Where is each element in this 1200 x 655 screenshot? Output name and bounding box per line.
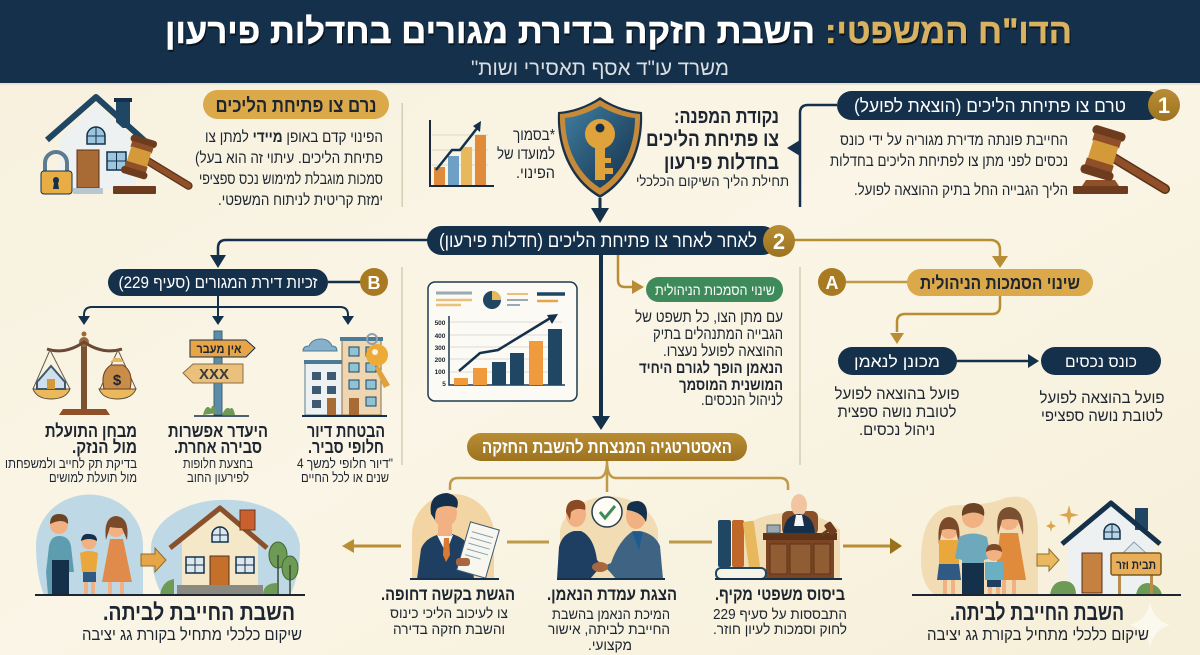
step 1 pill bbox=[837, 91, 1162, 120]
text: alternative housing: הבטחת דיור bbox=[307, 421, 385, 441]
header band bbox=[0, 0, 1200, 85]
outcome: right bbox=[912, 497, 1181, 644]
text bbox=[547, 584, 677, 654]
receiver pill: כונס נכסים bbox=[1065, 354, 1137, 371]
icon: gavel bbox=[1073, 124, 1165, 194]
body text: ימזת קריטית לניתוח המשפטי. bbox=[218, 192, 383, 209]
icon: judge, desk and books bbox=[715, 494, 842, 579]
text: no other reasonable option: בחצעת חלופות bbox=[183, 456, 253, 471]
strategy bracket bbox=[450, 461, 788, 492]
trustee pill: מכונן לנאמן bbox=[854, 353, 940, 371]
text: benefit versus harm bbox=[5, 421, 137, 485]
arrow to trustee bbox=[890, 296, 1000, 344]
text: המיכת הנאמן בהשבת bbox=[552, 607, 670, 623]
text: המושנית המוסמך bbox=[679, 377, 783, 394]
text: הגשת בקשה דחופה. bbox=[381, 584, 515, 604]
panel: deciding factors bbox=[41, 90, 389, 209]
arrow between pills bbox=[957, 354, 1039, 368]
note text bbox=[497, 127, 555, 182]
text: alternative housing: שנים או לכל החיים bbox=[301, 470, 389, 485]
father bbox=[46, 514, 74, 595]
trustee text: פועל בהוצאה לפועל bbox=[834, 385, 960, 403]
green pill: שינוי הסמכות הניהולית bbox=[655, 282, 775, 299]
text: השבת החייבת לביתה. bbox=[950, 599, 1124, 625]
chart: dashboard card: 300 bbox=[435, 345, 446, 352]
subtitle: משרד עו"ד אסף תאסירי ושות" bbox=[471, 57, 729, 80]
trustee pill bbox=[838, 347, 957, 375]
chart: dashboard card bbox=[428, 282, 577, 401]
B pill: זכיות דירת המגורים (סעיף 229) bbox=[118, 273, 318, 292]
panel: A administrative authority bbox=[818, 268, 1164, 439]
text: ההוצאה לפועל נעצרו. bbox=[663, 342, 783, 360]
text: alternative housing: חלופי סביר. bbox=[308, 437, 384, 457]
trees bbox=[269, 542, 298, 595]
receiver text bbox=[1040, 389, 1164, 425]
text: הנאמן הופך לגורם היחיד bbox=[639, 359, 783, 377]
text: הגבייה המתנהלים בתיק bbox=[653, 325, 783, 343]
text bbox=[713, 584, 847, 638]
mother bbox=[995, 507, 1026, 595]
section 2 branch lines bbox=[210, 240, 1008, 268]
step 1 connector with arrow bbox=[787, 105, 837, 207]
text: צו לעיכוב הליכי כינוס bbox=[390, 605, 508, 622]
panel: B right to home bbox=[5, 268, 393, 485]
arrow: down to step 2 bbox=[591, 198, 609, 223]
step 2 number badge bbox=[763, 225, 795, 257]
text: benefit versus harm: מבחן התועלת bbox=[45, 421, 137, 441]
B pill bbox=[108, 269, 328, 296]
connector: request to trustee bbox=[507, 540, 549, 544]
pill heading: נרם צו פתיחת הליכים bbox=[216, 95, 376, 117]
divider: top left bbox=[402, 103, 403, 207]
text: benefit versus harm: בדיקת תק לחייב ולמשפחתו bbox=[5, 456, 137, 471]
icon: lawyer holding document bbox=[410, 493, 499, 579]
turning point text: תחילת הליך השיקום הכלכלי bbox=[636, 173, 789, 189]
pill heading bbox=[203, 90, 389, 119]
sparkles bbox=[1046, 505, 1079, 532]
step 1 number badge: 1 bbox=[1158, 93, 1170, 118]
text: alternative housing: "דיור חלופי למשך 4 bbox=[297, 456, 393, 471]
strategy pill bbox=[467, 433, 747, 461]
panel: administrative change note bbox=[618, 255, 783, 409]
house bbox=[1050, 503, 1162, 595]
text: alternative housing bbox=[297, 421, 393, 485]
orange arrow bbox=[141, 548, 166, 572]
text: שיקום כלכלי מתחיל בקורת גג יציבה bbox=[927, 625, 1149, 644]
A pill bbox=[907, 269, 1093, 296]
step 2 number badge: 2 bbox=[773, 229, 785, 254]
boy bbox=[985, 544, 1003, 595]
icon: house with padlock and gavel bbox=[41, 97, 189, 194]
text: והשבת חזקה בדירה bbox=[393, 622, 505, 638]
turning point text: בחדלות פירעון bbox=[664, 151, 779, 174]
A badge and connector bbox=[818, 268, 908, 296]
arrow: to the right outcome bbox=[843, 538, 902, 554]
step 2 pill: לאחר לאחר צו פתיחת הליכים (חדלות פירעון) bbox=[439, 231, 757, 252]
text: התבססות על סעיף 229 bbox=[713, 606, 847, 623]
branching arrows bbox=[78, 296, 354, 325]
A pill: שינוי הסמכות הניהולית bbox=[920, 273, 1080, 293]
text: benefit versus harm: מול תועלת למושים bbox=[49, 470, 137, 485]
title: הדו"ח המשפטי: bbox=[825, 12, 1072, 51]
text: no other reasonable option: היעדר אפשרות bbox=[168, 421, 268, 441]
illustration: family and house bbox=[912, 497, 1181, 595]
house bbox=[160, 508, 277, 595]
chart: dashboard card: 200 bbox=[435, 357, 446, 364]
text: ביסוס משפטי מקיף. bbox=[715, 584, 845, 604]
B badge and connector: B bbox=[368, 273, 380, 293]
panel: turning point bbox=[430, 97, 789, 223]
text: no other reasonable option bbox=[168, 421, 268, 485]
receiver pill bbox=[1041, 347, 1161, 375]
text bbox=[635, 308, 783, 409]
icon: growth chart bbox=[430, 120, 494, 186]
text: שיקום כלכלי מתחיל בקורת גג יציבה bbox=[82, 625, 302, 644]
strategy step: urgent request bbox=[381, 493, 515, 638]
gold arrow bbox=[618, 255, 644, 294]
text: הצגת עמדת הנאמן. bbox=[547, 584, 677, 604]
green pill bbox=[646, 277, 783, 302]
text: החייבת לביתה, אישור bbox=[548, 621, 670, 638]
text: benefit versus harm: מול הנזק. bbox=[72, 437, 137, 457]
icon: balance scales bbox=[33, 332, 136, 415]
icon: signpost bbox=[183, 331, 255, 416]
B badge and connector bbox=[328, 268, 388, 296]
icon: shield with key bbox=[558, 97, 642, 198]
note text: *בסמוך bbox=[513, 127, 555, 144]
text bbox=[927, 599, 1149, 644]
step 1 number badge bbox=[1148, 89, 1180, 121]
house: תבית וזר bbox=[1116, 558, 1156, 572]
turning point text: נקודת המפנה: bbox=[674, 106, 779, 128]
icon: apartment buildings and key bbox=[302, 334, 390, 416]
body text: פתיחת הליכים. עיתוי זה הוא בעל) bbox=[195, 150, 383, 167]
text: מקצועי. bbox=[588, 638, 632, 654]
illustration: family going home bbox=[35, 495, 305, 595]
father bbox=[955, 503, 991, 595]
icon: handshake bbox=[557, 496, 665, 579]
girl bbox=[937, 517, 961, 595]
chart: dashboard card: 5 bbox=[442, 381, 446, 388]
text bbox=[381, 584, 515, 638]
receiver text: לטובת נושה ספציפי bbox=[1041, 407, 1163, 425]
body text: הפינוי קדם באופן מיידי למתן צו bbox=[205, 129, 383, 146]
panel: before the order bbox=[787, 89, 1180, 207]
text: לניהול הנכסים. bbox=[701, 391, 783, 409]
strategy step: trustee position bbox=[547, 496, 677, 654]
dividers: section 2 bbox=[402, 267, 800, 465]
icon: signpost: אין מעבר bbox=[196, 342, 242, 356]
strategy step: legal basis bbox=[713, 494, 847, 638]
step 1 text: נכסים לפני מתן צו לפתיחת הליכים בחדלות bbox=[830, 153, 1068, 170]
body text bbox=[195, 129, 383, 209]
A badge and connector: A bbox=[826, 273, 838, 293]
child bbox=[80, 534, 98, 595]
step 1 text bbox=[830, 132, 1068, 199]
turning point text bbox=[636, 106, 789, 189]
arrow: to the left outcome bbox=[342, 539, 401, 553]
trustee text: לטובת נושה ספצית bbox=[838, 403, 956, 421]
step 2 pill bbox=[427, 226, 777, 255]
text: עם מתן הצו, כל תשפט של bbox=[635, 308, 783, 326]
body text: סמכות מוגבלת למימוש נכס ספציפי bbox=[199, 171, 383, 188]
trustee text: ניהול נכסים. bbox=[859, 421, 935, 439]
turning point text: צו פתיחת הליכים bbox=[646, 128, 779, 151]
step 1 text: הליך הגבייה החל בתיק ההוצאה לפועל. bbox=[854, 182, 1068, 199]
step 1 pill: טרם צו פתיחת הליכים (הוצאת לפועל) bbox=[854, 95, 1126, 116]
step 1 text: החייבת פונתה מדירת מגוריה על ידי כונס bbox=[840, 132, 1068, 149]
note text: למועדו של bbox=[497, 146, 555, 163]
orange arrow bbox=[1037, 549, 1059, 571]
text: no other reasonable option: לפירעון החוב bbox=[187, 470, 249, 485]
text bbox=[82, 599, 302, 644]
chart: dashboard card: 100 bbox=[435, 369, 446, 376]
text: no other reasonable option: סבירה אחרת. bbox=[174, 437, 262, 457]
chart: dashboard card: 400 bbox=[435, 333, 446, 340]
text: השבת החייבת לביתה. bbox=[103, 599, 295, 625]
arrow: centre down to strategy bbox=[592, 255, 610, 430]
chart: dashboard card: 500 bbox=[435, 320, 446, 327]
note text: הפינוי. bbox=[516, 165, 555, 182]
watermark sparkle bbox=[1130, 602, 1170, 648]
outcome: left bbox=[35, 495, 305, 644]
mother bbox=[102, 516, 132, 595]
title: השבת חזקה בדירת מגורים בחדלות פירעון bbox=[165, 12, 815, 51]
text: לחוק וסמכות לעיון חוזר. bbox=[713, 621, 847, 638]
icon: balance scales: $ bbox=[113, 372, 122, 389]
receiver text: פועל בהוצאה לפועל bbox=[1040, 389, 1164, 407]
strategy pill: האסטרטגיה המנצחת להשבת החזקה bbox=[482, 437, 732, 457]
trustee text bbox=[834, 385, 960, 439]
connector: trustee to legal basis bbox=[669, 540, 712, 544]
icon: signpost: XXX bbox=[199, 366, 229, 383]
